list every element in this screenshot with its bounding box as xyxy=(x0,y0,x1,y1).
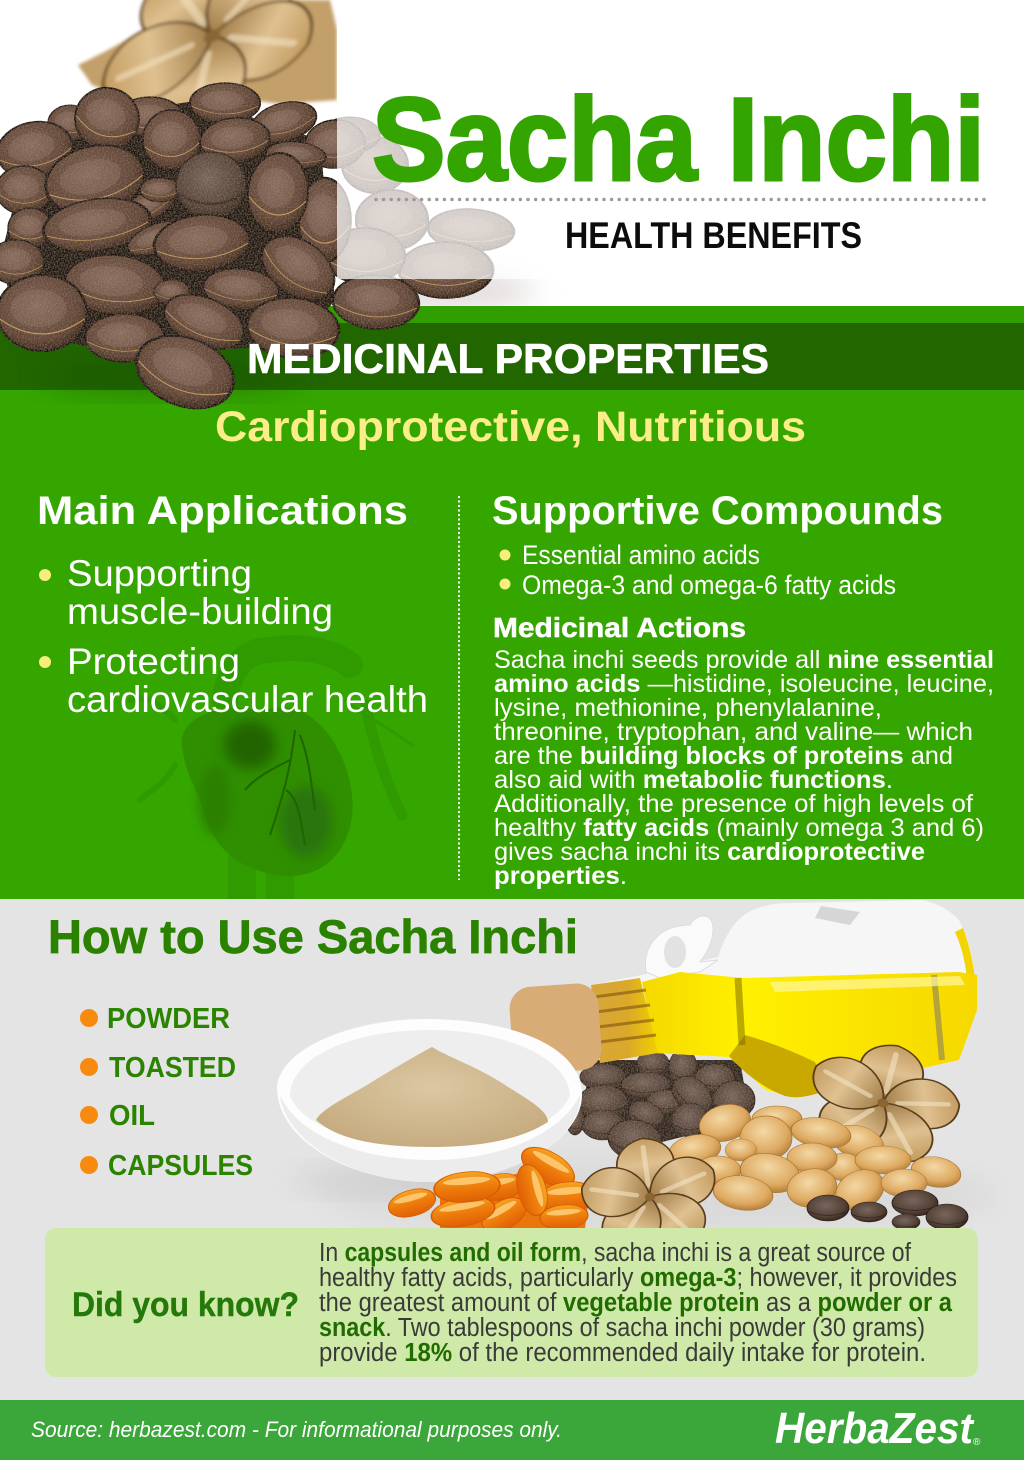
text block: medicinal actions: amino acids —histidine, isoleucine, leucine, xyxy=(494,670,994,698)
list: forms of use: TOASTED xyxy=(109,1052,236,1084)
bullet list: applications: Supporting xyxy=(67,553,252,594)
veil: pale overlay over right of seeds xyxy=(337,0,1024,279)
image: floor shadows xyxy=(290,1155,1000,1235)
list: forms of use: POWDER xyxy=(107,1003,230,1035)
callout text xyxy=(319,1239,957,1367)
text block: medicinal actions: healthy fatty acids (mainly omega 3 and 6) xyxy=(494,814,984,842)
panel: supportive compounds xyxy=(492,489,994,890)
list: forms of use: OIL xyxy=(109,1100,155,1132)
bullet list: applications: Protecting xyxy=(67,641,240,682)
logo: HerbaZest: HerbaZest xyxy=(775,1404,975,1453)
panel: main applications xyxy=(37,489,428,720)
powder mound xyxy=(316,1047,548,1147)
divider: dotted rule xyxy=(376,198,985,201)
text block: medicinal actions: are the building blocks of proteins and xyxy=(494,742,953,770)
text block: medicinal actions: Sacha inchi seeds provide all nine essential xyxy=(494,646,994,674)
heading: supportive compounds: Supportive Compounds xyxy=(492,489,943,533)
heading: subtitle: HEALTH BENEFITS xyxy=(565,215,862,256)
bullet list: applications: cardiovascular health xyxy=(67,679,428,720)
neck xyxy=(591,978,658,1063)
callout text: healthy fatty acids, particularly omega-3; however, it provides xyxy=(319,1264,957,1292)
image: bowl of powder xyxy=(277,1019,582,1182)
bullet list: compounds: Essential amino acids xyxy=(522,540,760,570)
callout heading: Did you know? xyxy=(72,1286,299,1324)
callout text: the greatest amount of vegetable protein as a powder or a xyxy=(319,1289,953,1317)
heading: medicinal properties: MEDICINAL PROPERTIES xyxy=(247,335,769,382)
image: oil bottle xyxy=(508,900,977,1098)
callout: did you know xyxy=(45,1228,978,1377)
footer xyxy=(0,1400,1024,1460)
heading: medicinal actions: Medicinal Actions xyxy=(493,612,746,643)
callout text: In capsules and oil form, sacha inchi is a great source of xyxy=(319,1239,912,1267)
liquid xyxy=(642,972,977,1098)
image: sacha inchi pod, top xyxy=(76,0,337,106)
source note: Source: herbazest.com - For informational purposes only. xyxy=(31,1417,562,1442)
image: sacha inchi pods and kernels xyxy=(567,1024,979,1269)
heading: title: Sacha Inchi xyxy=(372,74,985,206)
callout text: snack. Two tablespoons of sacha inchi powder (30 grams) xyxy=(319,1314,925,1342)
text block: medicinal actions: lysine, methionine, phenylalanine, xyxy=(494,694,882,722)
image: dark seeds xyxy=(566,1049,755,1164)
text block: medicinal actions: gives sacha inchi its cardioprotective xyxy=(494,838,925,866)
panel: how to use background xyxy=(0,899,1024,1400)
bullet list: applications xyxy=(39,553,428,720)
glass body xyxy=(591,900,977,1098)
divider: vertical dotted rule xyxy=(458,496,460,880)
logo registered mark: ® xyxy=(973,1437,981,1448)
handle xyxy=(645,916,718,978)
bullet list: applications: muscle-building xyxy=(67,591,333,632)
list: forms of use xyxy=(80,1003,253,1182)
text block: medicinal actions xyxy=(494,646,994,890)
image: oil capsules xyxy=(385,1140,597,1239)
image: pile of seeds xyxy=(0,81,535,421)
callout text: provide 18% of the recommended daily intake for protein. xyxy=(319,1339,926,1367)
icon: faded anatomical heart xyxy=(130,648,412,899)
icon: cork xyxy=(508,982,603,1075)
bullet list: compounds xyxy=(500,540,896,600)
list: forms of use: CAPSULES xyxy=(108,1150,253,1182)
heading: main applications: Main Applications xyxy=(37,489,408,533)
text block: medicinal actions: Additionally, the presence of high levels of xyxy=(494,790,973,818)
heading: how to use: How to Use Sacha Inchi xyxy=(48,910,578,963)
panel: medicinal properties background xyxy=(0,306,1024,899)
bullet list: compounds: Omega-3 and omega-6 fatty acids xyxy=(522,570,896,600)
text block: medicinal actions: also aid with metabolic functions . xyxy=(494,766,893,794)
text block: medicinal actions: properties. xyxy=(494,862,627,890)
text block: medicinal actions: threonine, tryptophan, and valine— which xyxy=(494,718,973,746)
subheading: properties: Cardioprotective, Nutritious xyxy=(215,403,806,451)
